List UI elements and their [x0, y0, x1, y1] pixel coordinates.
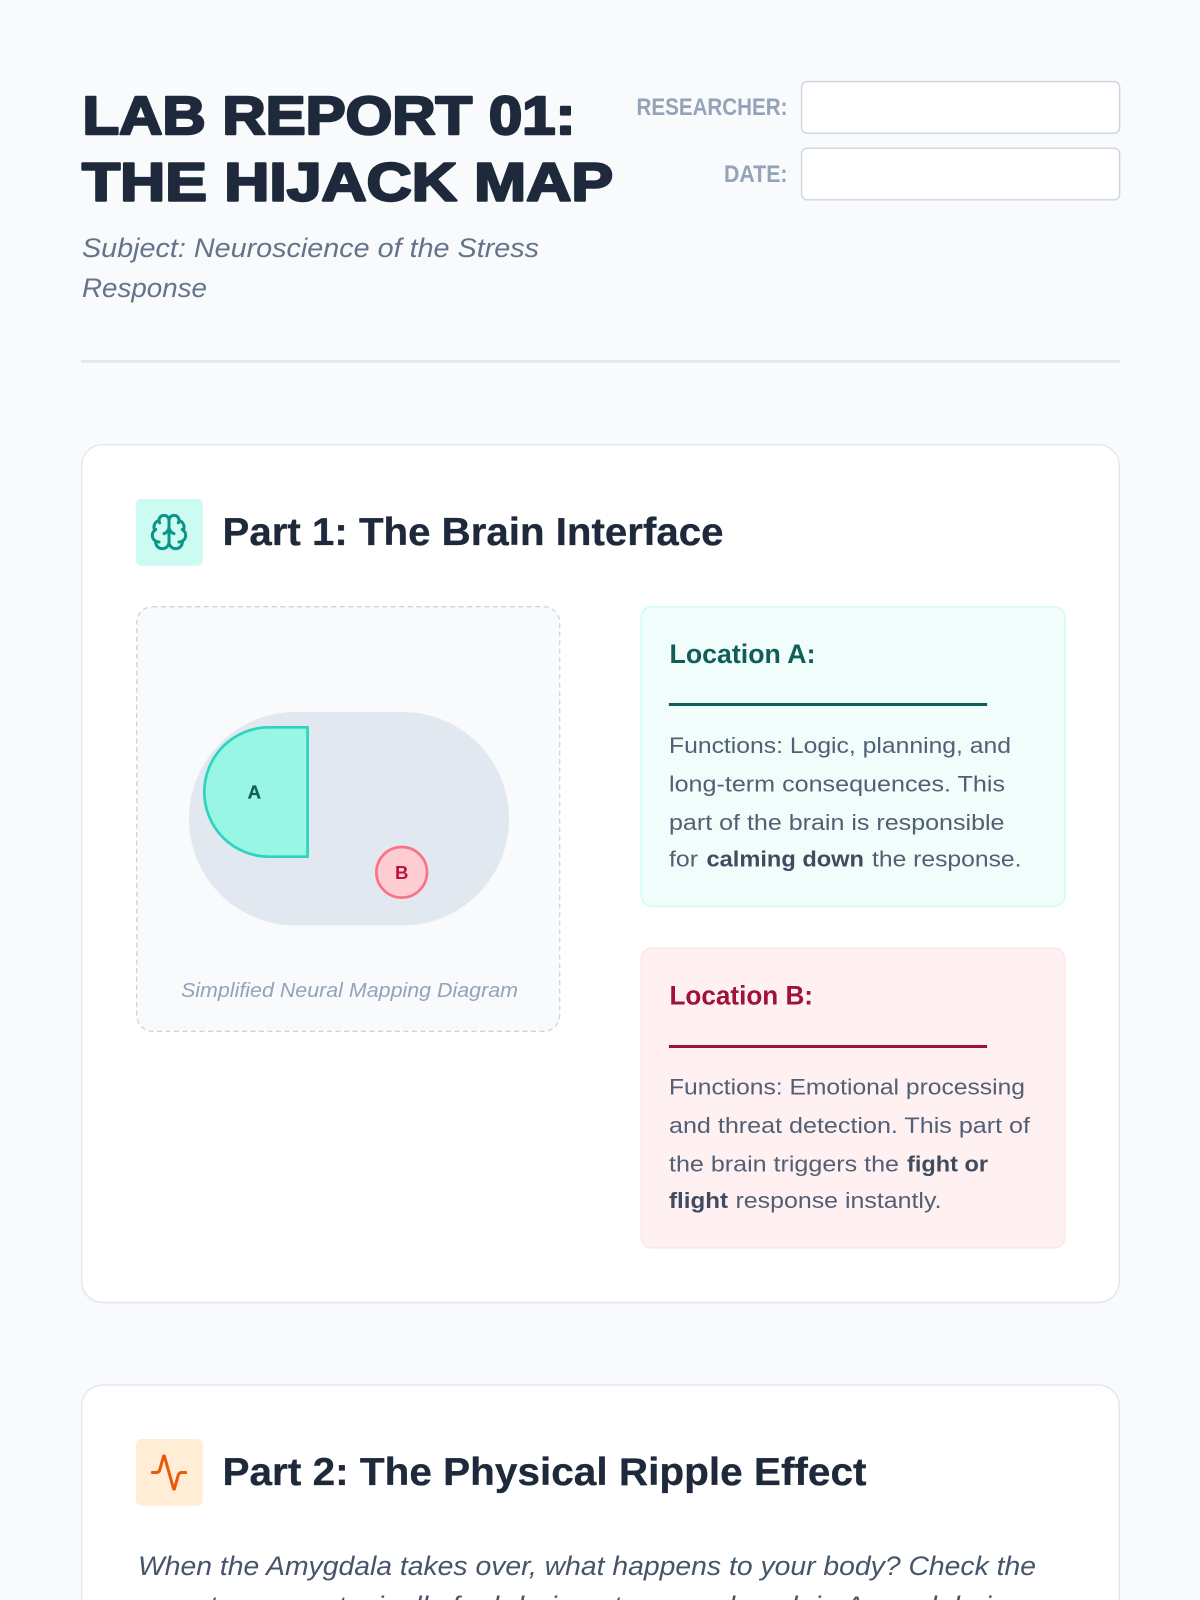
location B description	[669, 1074, 1031, 1213]
date field: DATE:	[724, 161, 788, 188]
researcher field: RESEARCHER:	[636, 94, 788, 121]
icon: brain	[136, 499, 203, 566]
subtitle: Response	[82, 273, 207, 303]
location A description: for	[669, 846, 699, 872]
intro instructions: When the Amygdala takes over, what happens to your body? Check the	[138, 1551, 1036, 1581]
heading: part 1: Part 1: The Brain Interface	[222, 511, 724, 554]
location A description: long-term consequences. This	[669, 772, 1005, 796]
icon: activity pulse	[136, 1439, 203, 1506]
panel: location A	[641, 607, 1065, 906]
location A label: Location A:	[670, 639, 816, 669]
date field	[724, 148, 1120, 200]
panel: part 1 the brain interface	[81, 445, 1120, 1304]
location B description: fight or	[907, 1152, 988, 1176]
title: LAB REPORT 01:	[82, 86, 576, 146]
researcher field	[636, 82, 1120, 133]
location A description	[669, 733, 1022, 872]
location A description: part of the brain is responsible	[669, 810, 1004, 835]
subtitle	[82, 233, 539, 303]
location A answer line: ________________________	[669, 678, 987, 708]
location B description: flight	[669, 1188, 729, 1213]
title: THE HIJACK MAP	[82, 153, 613, 213]
heading: part 2: Part 2: The Physical Ripple Effect	[222, 1451, 867, 1494]
location B answer line: ________________________	[669, 1020, 987, 1050]
panel: part 2 the physical ripple effect	[82, 1385, 1119, 1600]
location B description: Functions: Emotional processing	[669, 1074, 1025, 1100]
diagram: neural mapping	[137, 607, 560, 1031]
location A description: Functions: Logic, planning, and	[669, 733, 1011, 758]
location B description: the brain triggers the	[669, 1152, 899, 1176]
location B label: Location B:	[670, 980, 813, 1010]
intro instructions	[138, 1551, 1036, 1600]
subtitle: Subject: Neuroscience of the Stress	[82, 233, 539, 263]
diagram caption: Simplified Neural Mapping Diagram	[181, 980, 518, 1002]
location A region	[204, 727, 308, 857]
header	[82, 82, 1120, 303]
brain outline pill	[189, 712, 509, 926]
panel: location B	[641, 948, 1065, 1248]
location B marker: B	[395, 862, 408, 883]
location B description: response instantly.	[736, 1188, 942, 1213]
location A description: the response.	[872, 846, 1022, 872]
title	[82, 86, 613, 213]
location A description: calming down	[706, 846, 864, 872]
location B description: and threat detection. This part of	[669, 1113, 1031, 1138]
location B marker	[376, 847, 427, 898]
location A region: A	[248, 782, 261, 802]
